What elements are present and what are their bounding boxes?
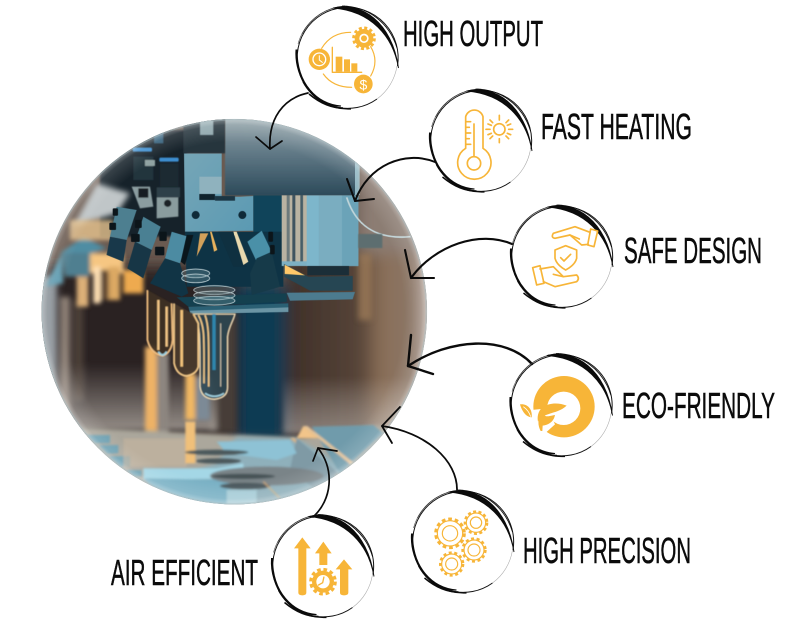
arrow: high output	[256, 93, 308, 149]
top housing	[225, 117, 358, 195]
arrow: air efficient	[313, 448, 337, 517]
badge: high precision	[411, 490, 514, 593]
cylinder unit	[282, 195, 358, 266]
badge: eco-friendly	[510, 354, 612, 457]
bottle necks	[182, 269, 235, 305]
preforms	[147, 290, 235, 399]
icon: ring with leaves	[520, 376, 595, 437]
badge: fast heating	[429, 89, 532, 192]
arrow: eco-friendly	[408, 335, 532, 374]
icon: arrows with clock gear	[294, 537, 352, 595]
arrow: high precision	[382, 407, 457, 491]
badge: safe design	[510, 205, 613, 308]
vignette	[42, 119, 427, 504]
photo: preform machine in circle	[30, 110, 443, 523]
arrow: fast heating	[347, 158, 435, 201]
left amber background	[45, 220, 210, 437]
arrow: safe design	[405, 239, 512, 278]
icon: hands and shield	[533, 227, 598, 287]
bottom metal table	[80, 424, 384, 484]
badge: air efficient	[271, 514, 374, 618]
plates	[287, 292, 355, 301]
label: fast heating: FAST HEATING	[541, 106, 692, 147]
machine rear upper left	[100, 130, 187, 237]
steel block	[184, 153, 253, 232]
label: air efficient: AIR EFFICIENT	[111, 552, 258, 593]
badge: high output	[296, 6, 398, 109]
icon: thermometer and sun	[458, 110, 513, 179]
gripper blocks	[107, 207, 280, 297]
label: high output: HIGH OUTPUT	[403, 13, 543, 54]
dark gap behind	[253, 195, 282, 232]
icon: gear, chart, clock and dollar: $	[359, 76, 367, 92]
icon: four gears	[436, 512, 487, 575]
